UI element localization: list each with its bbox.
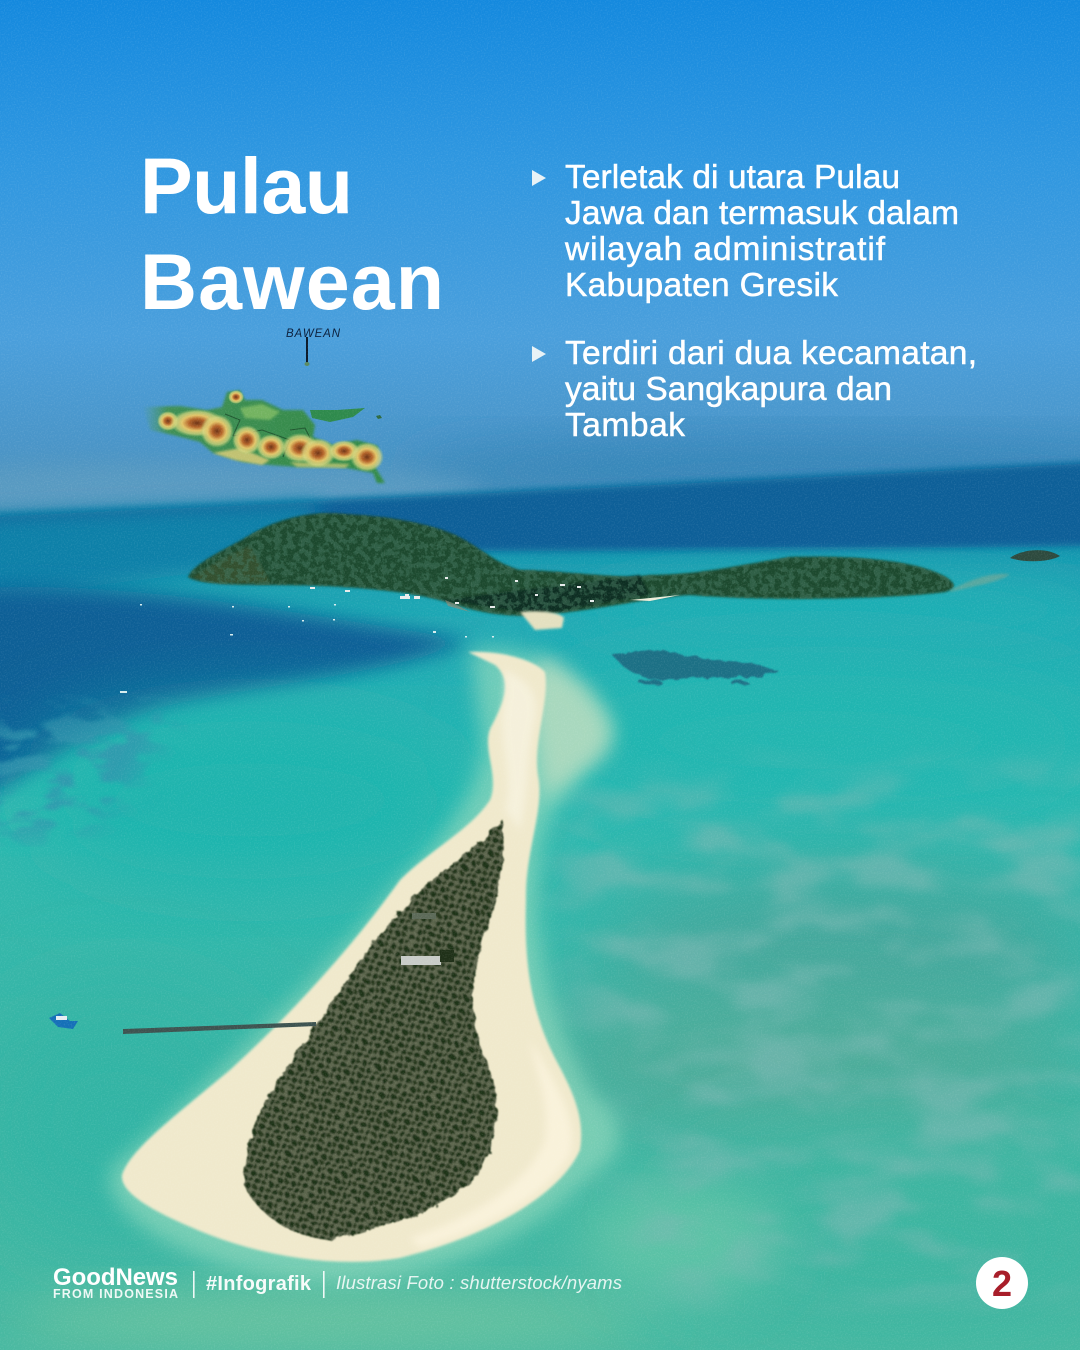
footer credits [53, 1264, 622, 1301]
small boats [120, 604, 494, 693]
goodnews logo: FROM INDONESIA [53, 1287, 178, 1301]
bawean marker [286, 328, 341, 366]
bullet two: Terdiri dari dua kecamatan, [565, 335, 977, 372]
page number badge: 2 [992, 1263, 1012, 1304]
background sea [0, 462, 1080, 1350]
bullet list [532, 159, 977, 444]
page number badge [976, 1257, 1028, 1309]
bullet two: yaitu Sangkapura dan [565, 371, 892, 408]
title [140, 141, 444, 326]
sandbar island [122, 652, 581, 1262]
title: Pulau [140, 141, 353, 230]
bullet one: wilayah administratif [564, 231, 886, 268]
java island map [143, 390, 385, 483]
bullet two [532, 335, 977, 444]
title: Bawean [140, 237, 444, 326]
background sky [0, 0, 1080, 540]
horizon haze [0, 440, 1080, 514]
palm plantation [244, 820, 504, 1240]
jetty [123, 1022, 316, 1034]
bullet two: Tambak [565, 407, 685, 444]
bullet one: Kabupaten Gresik [565, 267, 838, 304]
bullet one: Jawa dan termasuk dalam [565, 195, 959, 232]
reef patches [612, 650, 778, 685]
bullet one [532, 159, 959, 304]
bawean marker: BAWEAN [286, 328, 341, 340]
distant island [188, 513, 1060, 630]
shallows around sandbar [109, 648, 620, 1282]
goodnews logo: GoodNews [53, 1264, 178, 1291]
water mottling [0, 700, 1080, 1290]
photo credit: Ilustrasi Foto : shutterstock/nyams [336, 1272, 622, 1293]
building on sandbar [401, 913, 454, 965]
boat [49, 1013, 78, 1029]
bullet one: Terletak di utara Pulau [565, 159, 900, 196]
hashtag: #Infografik [206, 1273, 312, 1295]
